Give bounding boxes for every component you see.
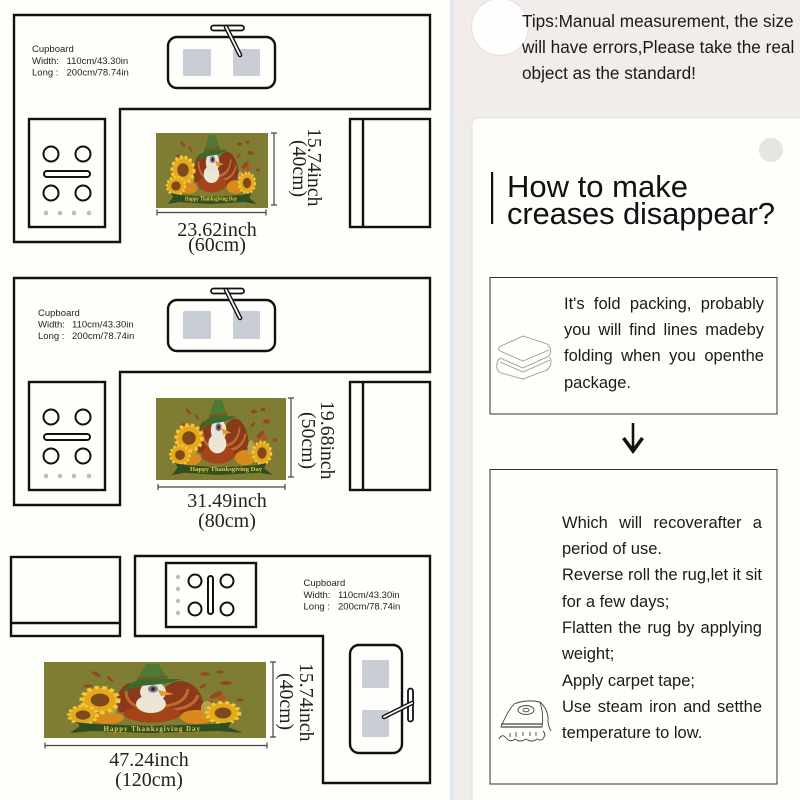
cupboard dimensions: Long : <box>38 331 64 342</box>
width dimension <box>158 484 285 490</box>
counter outline <box>14 278 430 505</box>
cupboard dimensions: Cupboard <box>32 44 74 55</box>
panel: tips text: object as the standard! <box>522 63 696 83</box>
icon: sink <box>350 645 413 753</box>
cupboard dimensions <box>38 308 134 342</box>
size labels: (80cm) <box>198 510 256 532</box>
counter outline <box>14 15 430 242</box>
cupboard dimensions: Long : <box>32 68 58 78</box>
panel: 80cm layout <box>14 278 430 532</box>
rug 120cm: Happy Thanksgiving Day <box>104 725 200 733</box>
cupboard dimensions: 200cm/78.74in <box>72 331 134 342</box>
icon: folded rug <box>497 336 551 379</box>
counter outline <box>135 556 430 783</box>
height dimension <box>271 133 277 205</box>
panel: 60cm layout <box>14 15 430 256</box>
panel: how-to card <box>472 118 800 800</box>
heading: creases disappear? <box>507 196 775 231</box>
cupboard dimensions <box>32 44 129 78</box>
size labels: (50cm) <box>297 412 319 469</box>
size labels: 19.68inch <box>316 401 338 480</box>
size labels: (120cm) <box>115 769 183 791</box>
text block: recovery steps: Which will recoverafter a <box>562 514 762 532</box>
cupboard dimensions: Cupboard <box>38 308 80 319</box>
size labels: (60cm) <box>188 234 246 256</box>
recovery box outline <box>490 470 777 784</box>
text block: recovery steps: Reverse roll the rug,let it sit <box>562 566 762 584</box>
card hole <box>759 138 783 162</box>
rug 80cm <box>156 398 286 480</box>
height dimension <box>270 662 276 737</box>
text block: recovery steps: weight; <box>562 645 614 663</box>
text block: recovery steps: temperature to low. <box>562 724 702 742</box>
size labels <box>177 128 325 256</box>
width dimension <box>157 210 266 216</box>
text block: recovery steps: Apply carpet tape; <box>562 672 695 690</box>
cupboard dimensions: 110cm/43.30in <box>338 590 400 601</box>
cupboard dimensions: Cupboard <box>304 578 345 589</box>
cupboard dimensions: 200cm/78.74in <box>66 68 129 78</box>
rug 60cm: Happy Thanksgiving Day <box>185 196 237 202</box>
cupboard dimensions: 110cm/43.30in <box>66 56 128 67</box>
rug 120cm <box>44 662 266 738</box>
icon: fridge <box>350 119 430 227</box>
size labels: 23.62inch <box>177 219 257 241</box>
text block: recovery steps <box>562 514 762 742</box>
heading <box>507 169 775 231</box>
cupboard dimensions: 110cm/43.30in <box>72 320 134 330</box>
text block: fold explanation <box>564 294 764 392</box>
icon: fridge <box>11 557 120 636</box>
cupboard dimensions: Width: <box>304 590 330 601</box>
panel: 120cm layout <box>11 556 430 791</box>
cupboard dimensions <box>304 578 400 612</box>
icon: stove <box>29 382 105 490</box>
size labels: 15.74inch <box>303 128 325 207</box>
rug 60cm <box>156 133 268 208</box>
cupboard dimensions: Width: <box>32 56 59 67</box>
size labels: (40cm) <box>275 673 297 730</box>
text block: fold explanation: you will find lines madeby <box>564 321 764 339</box>
panel: tips text: Tips:Manual measurement, the size <box>522 11 794 31</box>
icon: stove <box>166 563 256 627</box>
cupboard dimensions: 200cm/78.74in <box>338 602 400 612</box>
cupboard dimensions: Long : <box>304 602 330 612</box>
text block: recovery steps: Use steam iron and setthe <box>562 698 762 716</box>
text block: fold explanation: It's fold packing, probably <box>564 294 764 312</box>
text block: recovery steps: period of use. <box>562 540 662 558</box>
decorative punched circle top <box>472 0 528 56</box>
cupboard dimensions: Width: <box>38 320 65 330</box>
size labels: 47.24inch <box>109 749 189 771</box>
heading: How to make <box>507 169 688 204</box>
size labels: (40cm) <box>288 140 310 197</box>
icon: fridge <box>350 382 430 490</box>
icon: sink <box>168 26 275 88</box>
height dimension <box>288 398 294 477</box>
text block: fold explanation: package. <box>564 374 631 392</box>
size labels <box>187 401 338 532</box>
fold box outline <box>490 278 777 414</box>
icon: steam iron <box>499 701 551 741</box>
panel: tips text <box>521 11 794 83</box>
icon: stove <box>29 119 105 227</box>
icon: sink <box>168 288 275 351</box>
heading accent bar <box>491 172 493 224</box>
arrow down <box>624 423 642 451</box>
rug 80cm: Happy Thanksgiving Day <box>190 466 263 473</box>
width dimension <box>45 742 267 748</box>
size labels: 31.49inch <box>187 490 267 512</box>
text block: recovery steps: for a few days; <box>562 593 669 611</box>
size labels <box>109 663 317 791</box>
text block: fold explanation: folding when you openthe <box>564 347 764 365</box>
text block: recovery steps: Flatten the rug by applying <box>562 619 762 637</box>
page background: right column <box>450 0 800 800</box>
size labels: 15.74inch <box>295 663 317 742</box>
panel: tips text: will have errors,Please take the real <box>521 37 794 57</box>
